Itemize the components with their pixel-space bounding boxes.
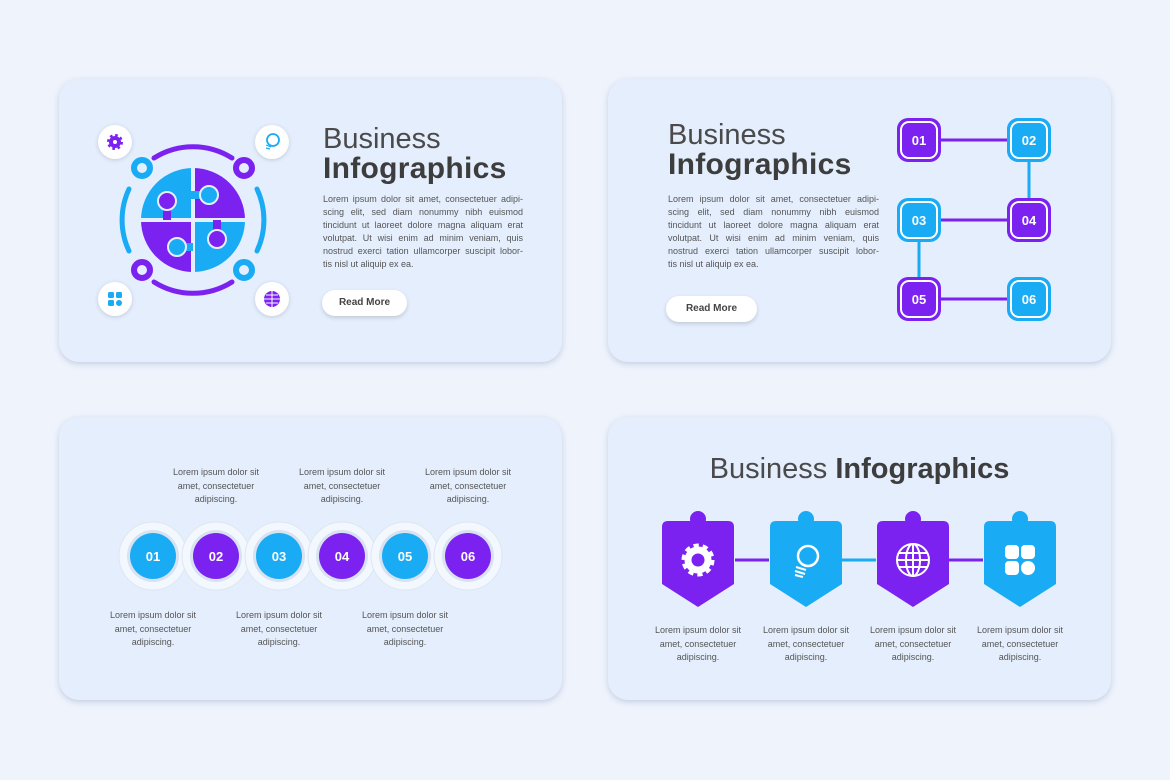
circles: 05	[398, 549, 412, 564]
captions top: Lorem ipsum dolor sit	[173, 467, 259, 477]
title: Infographics	[668, 148, 852, 181]
captions: amet, consectetuer	[875, 638, 951, 648]
text block: tis nisl ut aliquip ex ea.	[668, 259, 759, 269]
text block: scing elit, sed diam nonummy nibh euismod	[668, 207, 879, 217]
captions bottom	[110, 610, 448, 647]
circles	[118, 522, 502, 590]
circles: 06	[461, 549, 475, 564]
button: Read More	[339, 297, 390, 308]
captions	[655, 625, 1063, 662]
shield icons	[662, 511, 1056, 607]
text block: scing elit, sed diam nonummy nibh euismod	[323, 207, 523, 217]
captions: adipiscing.	[677, 652, 719, 662]
button	[666, 296, 757, 322]
captions bottom: adipiscing.	[258, 637, 300, 647]
text block: nostrud exerci tation ullamcorper suscipit lobor-	[323, 246, 523, 256]
puzzle illustration	[96, 124, 290, 318]
panel: puzzle	[59, 79, 562, 362]
panel: numbered grid	[608, 79, 1111, 362]
captions top: Lorem ipsum dolor sit	[425, 467, 511, 477]
captions top: adipiscing.	[447, 494, 489, 504]
captions: Lorem ipsum dolor sit	[763, 625, 849, 635]
panel: circle timeline	[59, 417, 562, 700]
captions bottom: Lorem ipsum dolor sit	[362, 610, 448, 620]
captions: adipiscing.	[785, 652, 827, 662]
button	[322, 290, 407, 316]
captions: Lorem ipsum dolor sit	[977, 625, 1063, 635]
captions: amet, consectetuer	[660, 638, 736, 648]
captions bottom: Lorem ipsum dolor sit	[110, 610, 196, 620]
circles: 03	[272, 549, 286, 564]
text block: Lorem ipsum dolor sit amet, consectetuer adipi-	[323, 194, 523, 204]
title: Business	[323, 123, 441, 155]
title	[668, 119, 852, 181]
captions bottom: adipiscing.	[384, 637, 426, 647]
captions bottom: amet, consectetuer	[115, 624, 191, 634]
captions top: amet, consectetuer	[430, 480, 506, 490]
circles: 01	[146, 549, 160, 564]
captions bottom: adipiscing.	[132, 637, 174, 647]
button: Read More	[686, 303, 737, 314]
captions: Lorem ipsum dolor sit	[870, 625, 956, 635]
captions top: amet, consectetuer	[304, 480, 380, 490]
captions: adipiscing.	[892, 652, 934, 662]
captions bottom: amet, consectetuer	[241, 624, 317, 634]
captions bottom: amet, consectetuer	[367, 624, 443, 634]
title: Infographics	[323, 152, 507, 185]
captions top: amet, consectetuer	[178, 480, 254, 490]
text block: tis nisl ut aliquip ex ea.	[323, 259, 414, 269]
captions top: adipiscing.	[195, 494, 237, 504]
text block	[323, 194, 523, 269]
circles: 04	[335, 549, 350, 564]
title: Business Infographics	[710, 453, 1009, 485]
text block: volutpat. Ut wisi enim ad minim veniam, quis	[323, 233, 523, 243]
title: Business	[668, 119, 786, 151]
step grid: 04	[1022, 213, 1037, 228]
panel: shields	[608, 417, 1111, 700]
captions: amet, consectetuer	[982, 638, 1058, 648]
step grid	[897, 118, 1051, 321]
step grid: 01	[912, 133, 926, 148]
step grid: 03	[912, 213, 926, 228]
text block: nostrud exerci tation ullamcorper suscipit lobor-	[668, 246, 879, 256]
captions top: Lorem ipsum dolor sit	[299, 467, 385, 477]
text block: Lorem ipsum dolor sit amet, consectetuer adipi-	[668, 194, 879, 204]
step grid: 06	[1022, 292, 1036, 307]
title	[323, 123, 507, 185]
captions: Lorem ipsum dolor sit	[655, 625, 741, 635]
circles: 02	[209, 549, 223, 564]
text block: volutpat. Ut wisi enim ad minim veniam, quis	[668, 233, 879, 243]
text block: tincidunt ut laoreet dolore magna aliquam erat	[668, 220, 879, 230]
text block	[668, 194, 879, 269]
captions: adipiscing.	[999, 652, 1041, 662]
captions top: adipiscing.	[321, 494, 363, 504]
captions: amet, consectetuer	[768, 638, 844, 648]
step grid: 02	[1022, 133, 1036, 148]
captions top	[173, 467, 511, 504]
text block: tincidunt ut laoreet dolore magna aliquam erat	[323, 220, 523, 230]
captions bottom: Lorem ipsum dolor sit	[236, 610, 322, 620]
step grid: 05	[912, 292, 926, 307]
